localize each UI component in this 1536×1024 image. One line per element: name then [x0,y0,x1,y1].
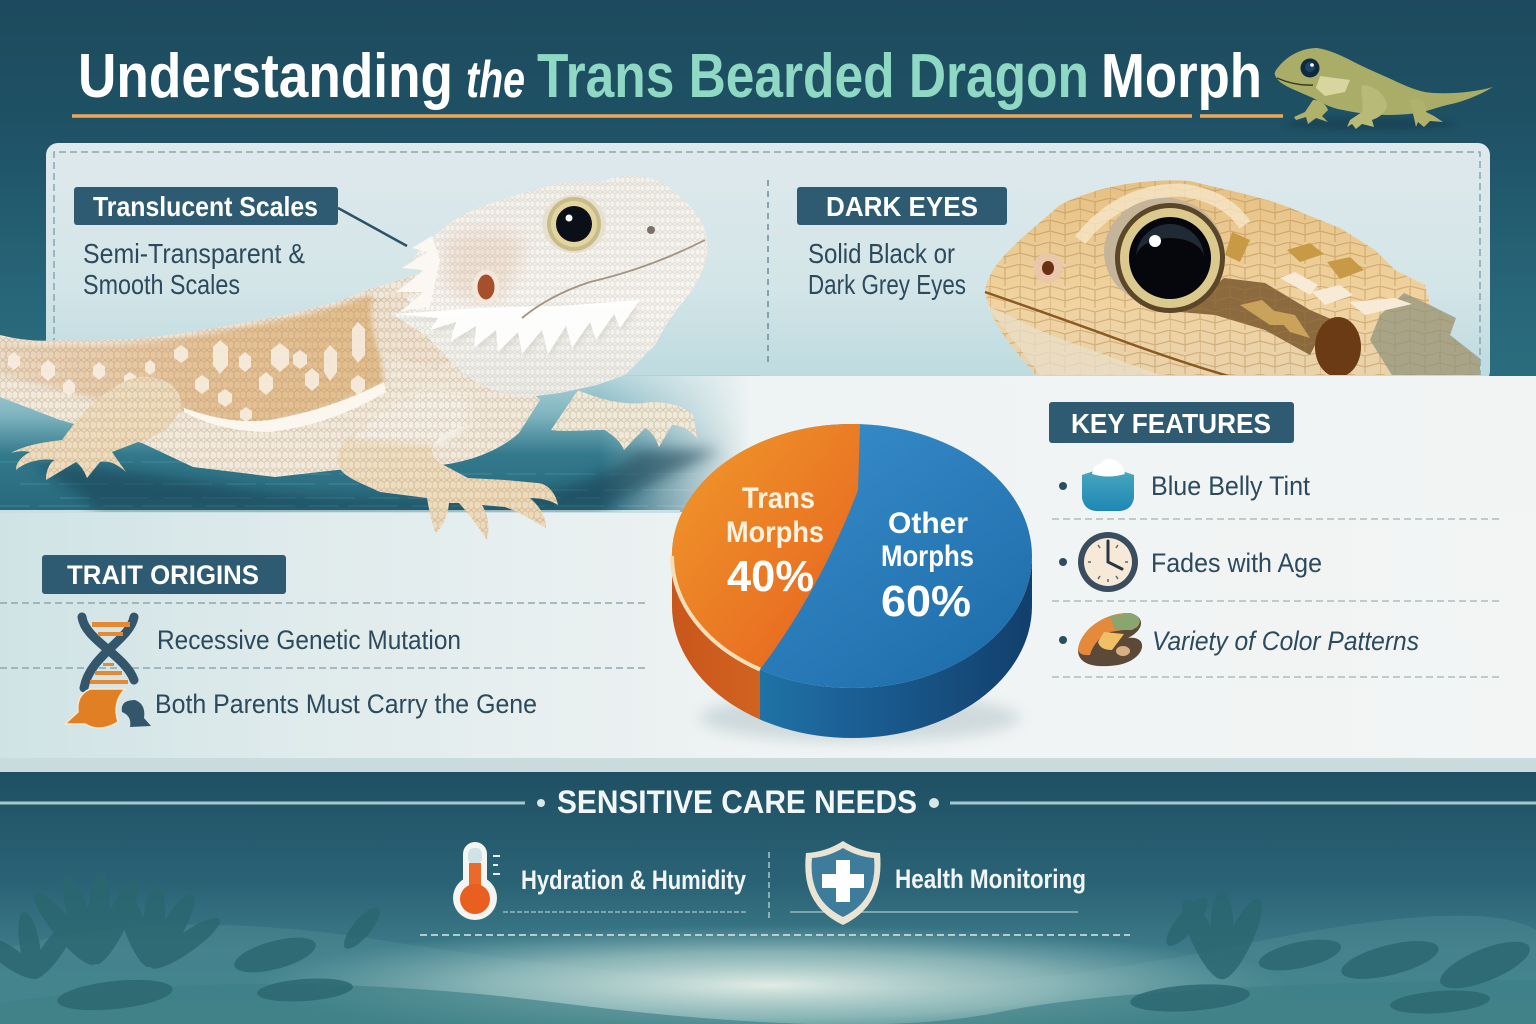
brow band [1080,190,1245,240]
main lizard illustration [0,176,720,540]
callout text [83,238,305,300]
title [78,42,1262,111]
snout pale fringe [986,305,1160,375]
callout text: Semi-Transparent & [83,238,305,269]
pie label: trans: 40% [727,552,814,601]
title: Trans Bearded Dragon [537,42,1089,111]
pie label: other: 60% [881,577,971,626]
feature: blue belly tint [1059,459,1310,511]
back tan area [0,294,384,427]
trait text: Recessive Genetic Mutation [157,625,461,655]
care item: hydration and humidity: Hydration & Humidity [521,865,746,895]
feature: variety of color patterns: Variety of Color Patterns [1152,626,1419,656]
panel: top features [46,143,1490,383]
trait origins heading [42,555,286,594]
pale patches [1280,272,1412,315]
mouth line [985,292,1235,378]
icon: clock [1078,532,1138,592]
icon: small lizard [1275,48,1493,130]
title: Morph [1101,42,1262,111]
heading: sensitive care needs [0,784,1536,820]
neck collar [372,285,450,370]
beard spikes [394,300,640,354]
teal floor band [0,375,760,512]
trait text [155,625,537,719]
feature: variety of color patterns [1059,613,1419,666]
care item: health monitoring [790,841,1086,925]
key features heading: KEY FEATURES [1071,408,1271,439]
eye close-up illustration [985,180,1482,380]
nostril [1033,253,1063,283]
icon: dna [65,617,151,728]
title: Understanding [78,42,453,111]
icon: blue belly [1082,459,1134,511]
pie side: orange [672,576,760,720]
pie label: trans [726,482,824,601]
pie label: other [881,507,974,626]
pie shadow [700,694,1020,742]
feature: fades with age [1059,532,1322,592]
callout text: Smooth Scales [83,269,240,300]
big eye [1104,198,1225,313]
pie label: trans: Morphs [726,516,824,549]
foliage: left [0,871,386,1015]
body and tail [0,273,540,477]
key features heading [1049,402,1294,443]
beard spikes shadow [396,306,640,358]
pie slice: trans morphs 40% [672,424,860,670]
pale belly crescent [184,382,386,432]
near front leg [337,390,558,540]
pie chart [672,424,1032,742]
pie slice: other morphs 60% [672,424,1032,688]
ear opening [1315,317,1361,377]
callout text: Solid Black or [808,238,955,269]
panel: bottom care band [0,772,1536,1024]
pie label: other: Other [888,507,968,540]
panel: lower area [0,510,1536,758]
callout: dark eyes: DARK EYES [826,191,978,222]
icon: shield [805,841,881,925]
tan stripes in patch [1240,300,1310,338]
lizard head and beard [390,176,707,397]
trait text: Both Parents Must Carry the Gene [155,689,537,719]
title underline [72,114,1283,118]
care item: health monitoring: Health Monitoring [895,864,1086,894]
ear [475,272,497,302]
neck spikes [396,236,440,312]
back blotches [8,322,365,422]
callout text: Dark Grey Eyes [808,269,966,300]
callout text [808,238,966,300]
neck collar scales [372,285,450,370]
panel: lower right white area [600,376,1536,512]
eye [542,195,606,253]
far front leg [551,390,698,450]
care item: hydration and humidity [453,842,747,920]
icon: thermometer [453,842,500,920]
pie label: other: Morphs [881,540,974,573]
title: the [466,51,525,109]
callout: dark eyes [797,187,1007,300]
lizard shadow [30,450,720,510]
pie side: blue [760,559,1032,738]
feature: fades with age: Fades with Age [1151,548,1322,578]
foliage: right [1129,891,1535,1016]
pie rim [672,556,760,670]
grey neck scales [1370,293,1482,380]
heading: sensitive care needs: SENSITIVE CARE NEEDS [557,784,917,820]
panel: key features [1049,402,1502,677]
back leg [11,377,181,480]
dark patch [1180,278,1345,355]
nostril [647,226,655,234]
pie label: trans: Trans [742,482,815,515]
callout: translucent scales [74,187,407,300]
mouth line [522,240,705,318]
trait origins heading: TRAIT ORIGINS [67,560,259,590]
callout: translucent scales: Translucent Scales [93,191,318,222]
icon: palette [1078,613,1142,666]
panel: trait origins [0,555,645,728]
feature: blue belly tint: Blue Belly Tint [1151,471,1310,501]
peach cheek [445,230,525,301]
